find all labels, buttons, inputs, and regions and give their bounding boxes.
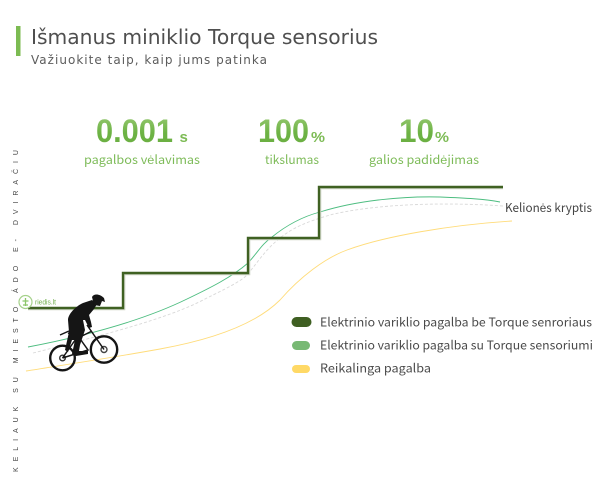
- vertical slogan: KELIAUK SU MIESTO ÁDO E- DVIRAČIU: [11, 150, 20, 472]
- legend: required assistance: Reikalinga pagalba: [320, 360, 431, 376]
- stat: power increase: [369, 113, 479, 168]
- subtitle: Važiuokite taip, kaip jums patinka: [31, 53, 267, 67]
- logo: riedis.lt: riedis.lt: [35, 300, 56, 306]
- stat: assistance delay: s: [180, 129, 188, 146]
- curve: motor assistance with torque sensor: [28, 197, 500, 347]
- step line: motor assistance without torque sensor: [28, 187, 503, 308]
- stat: assistance delay: 0.001: [96, 113, 173, 149]
- stat: accuracy: 100: [258, 113, 309, 149]
- legend: [292, 314, 593, 376]
- rider body: [65, 300, 97, 356]
- stat: accuracy: %: [311, 129, 325, 146]
- chart: assistance curves: [26, 187, 512, 371]
- rear wheel: [50, 346, 75, 370]
- logo: riedis.lt: [19, 296, 56, 308]
- legend: with torque sensor: Elektrinio variklio pagalba su Torque sensoriumi: [320, 336, 593, 354]
- stat: power increase: %: [435, 129, 449, 146]
- stat: accuracy: [258, 113, 325, 168]
- curve: required assistance: [26, 221, 512, 371]
- stat: assistance delay: pagalbos v ėlavimas: [84, 151, 200, 168]
- bike frame: [60, 325, 104, 358]
- front wheel: [91, 336, 117, 363]
- curve: grey reference: [33, 204, 503, 353]
- stat: assistance delay: [84, 113, 200, 168]
- rider helmet and head: [92, 294, 105, 306]
- step shadow: [28, 188, 503, 309]
- stat: power increase: 10: [399, 113, 434, 149]
- stat: power increase: galios padid ėjimas: [369, 151, 479, 168]
- direction label: Kelionės kryptis: [505, 199, 592, 216]
- legend: without torque sensor: Elektrinio variklio pagalba be Torque senroriaus: [320, 314, 592, 330]
- icon: cyclist: [50, 294, 117, 370]
- title accent bar: [16, 26, 20, 56]
- stat: accuracy: tikslumas: [265, 151, 319, 168]
- title: Išmanus miniklio Torque sensorius: [31, 25, 378, 49]
